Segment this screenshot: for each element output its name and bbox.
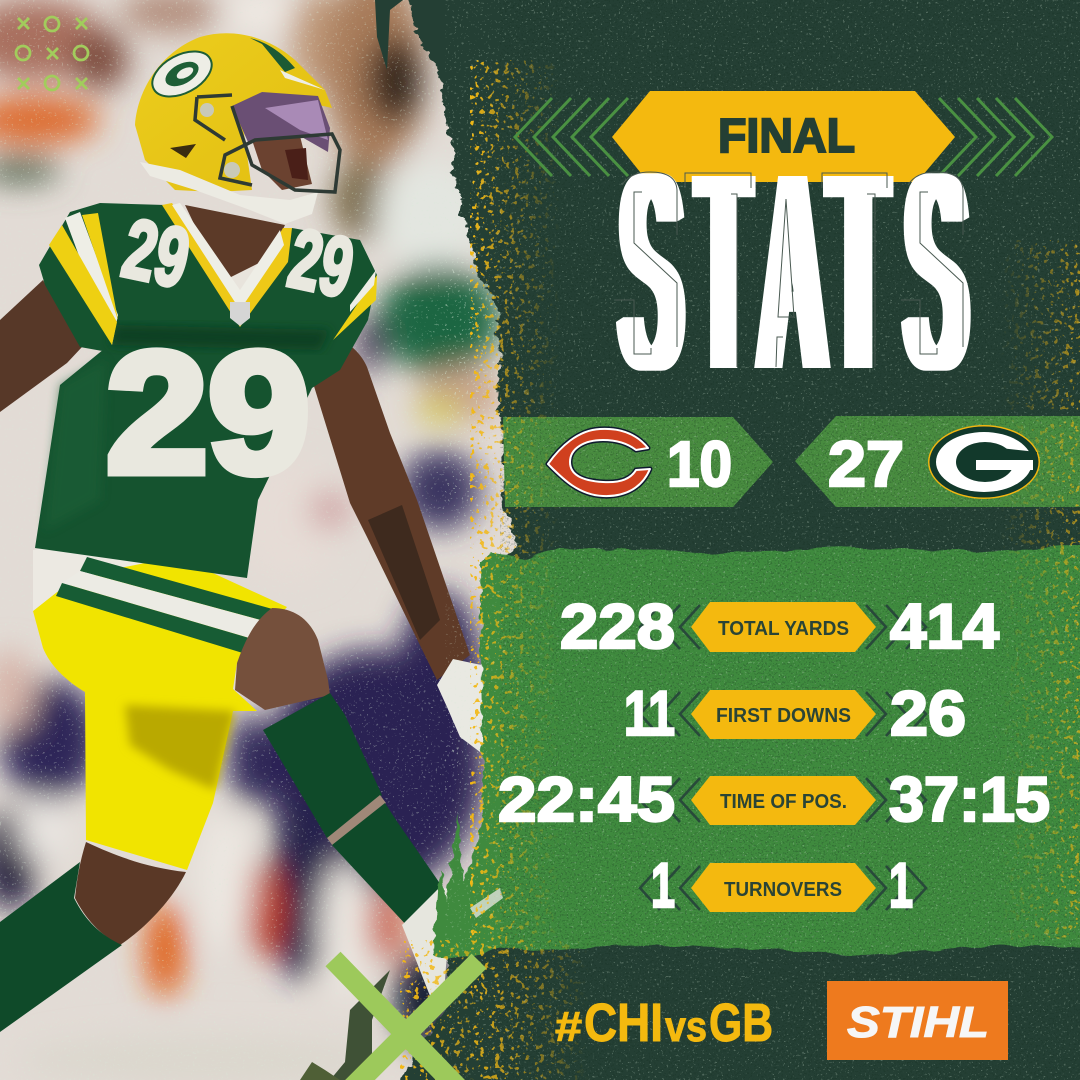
chevrons bbox=[640, 692, 926, 736]
title: STATS: T bbox=[831, 115, 886, 427]
dark green background panel with brushed edge bbox=[300, 0, 1080, 1080]
sponsor logo: STIHL bbox=[827, 981, 1008, 1060]
helmet bbox=[135, 33, 340, 224]
glove bbox=[437, 659, 486, 755]
big lime X bbox=[333, 959, 479, 1080]
Bears value: 228 bbox=[560, 592, 675, 662]
stat row: time of possession bbox=[498, 765, 1050, 835]
Bears score: 10 bbox=[667, 428, 732, 500]
title: STATS: S bbox=[907, 115, 965, 427]
far lower leg bbox=[0, 842, 186, 1032]
score band background: Bears bbox=[503, 417, 773, 507]
stat row: turnovers bbox=[640, 851, 926, 921]
Packers score: 27 bbox=[828, 428, 904, 500]
stat row: first downs bbox=[624, 679, 966, 749]
player photo: celebrating Packers player bbox=[0, 33, 486, 1032]
Packers value: 26 bbox=[890, 679, 966, 749]
Packers value: 37:15 bbox=[889, 765, 1050, 835]
title: STATS bbox=[615, 115, 965, 428]
pill label: TURNOVERS bbox=[724, 878, 842, 901]
chevrons bbox=[640, 866, 926, 910]
icon: Green Bay Packers logo bbox=[928, 425, 1040, 499]
pill label bbox=[691, 776, 876, 825]
score: Packers bbox=[828, 425, 1040, 500]
jersey numbers: 29 bbox=[115, 201, 197, 306]
icon: Chicago Bears logo bbox=[548, 429, 650, 496]
jersey bbox=[35, 201, 377, 578]
score band background: Packers bbox=[795, 416, 1080, 507]
hashtag: #CHIvsGB: CHI bbox=[584, 993, 663, 1053]
hashtag: #CHIvsGB: # bbox=[555, 1003, 582, 1050]
shorts bbox=[33, 538, 287, 870]
chevrons bbox=[640, 778, 926, 822]
chevrons: right of title bbox=[939, 98, 1052, 176]
panel: green stats field bbox=[433, 543, 1080, 958]
Bears value: 11 bbox=[624, 679, 675, 749]
icon: X and O play grid bbox=[16, 17, 88, 90]
score: Bears bbox=[548, 428, 732, 500]
hashtag: #CHIvsGB bbox=[555, 993, 773, 1053]
pill label: TIME OF POS. bbox=[720, 790, 847, 813]
sponsor logo: STIHL: STIHL bbox=[847, 998, 989, 1047]
title: STATS: S bbox=[622, 115, 680, 427]
jersey numbers: 29 bbox=[106, 317, 310, 509]
pill label bbox=[691, 690, 876, 739]
photo background: blurred stadium crowd bbox=[0, 0, 540, 1080]
knee bbox=[235, 608, 330, 710]
title banner: FINAL: FINAL bbox=[718, 110, 855, 163]
decorative gold and white paint splatter bbox=[400, 0, 1080, 1080]
Bears value: 1 bbox=[651, 851, 675, 921]
pill label bbox=[691, 863, 876, 912]
chevrons bbox=[640, 605, 926, 649]
Packers value: 414 bbox=[890, 592, 999, 662]
right arm with tattoo bbox=[313, 337, 470, 680]
hashtag: #CHIvsGB: vs bbox=[665, 1003, 707, 1051]
jersey numbers: 29 bbox=[281, 211, 361, 315]
pill label: TOTAL YARDS bbox=[718, 617, 849, 640]
Packers value: 1 bbox=[889, 851, 913, 921]
shin sleeves and shoe bbox=[263, 693, 452, 996]
title: STATS: T bbox=[700, 117, 747, 428]
shoe toe showing through the brush bbox=[470, 888, 503, 918]
pill label: FIRST DOWNS bbox=[716, 704, 851, 727]
left arm bbox=[0, 280, 82, 412]
title banner: FINAL bbox=[612, 91, 955, 182]
jersey numbers bbox=[106, 201, 361, 509]
hashtag: #CHIvsGB: GB bbox=[709, 993, 773, 1053]
Bears value: 22:45 bbox=[498, 765, 675, 835]
title: STATS: A bbox=[764, 115, 821, 428]
stat row: total yards bbox=[560, 592, 999, 662]
chevrons: left of title bbox=[515, 98, 628, 176]
pill label bbox=[691, 602, 876, 652]
